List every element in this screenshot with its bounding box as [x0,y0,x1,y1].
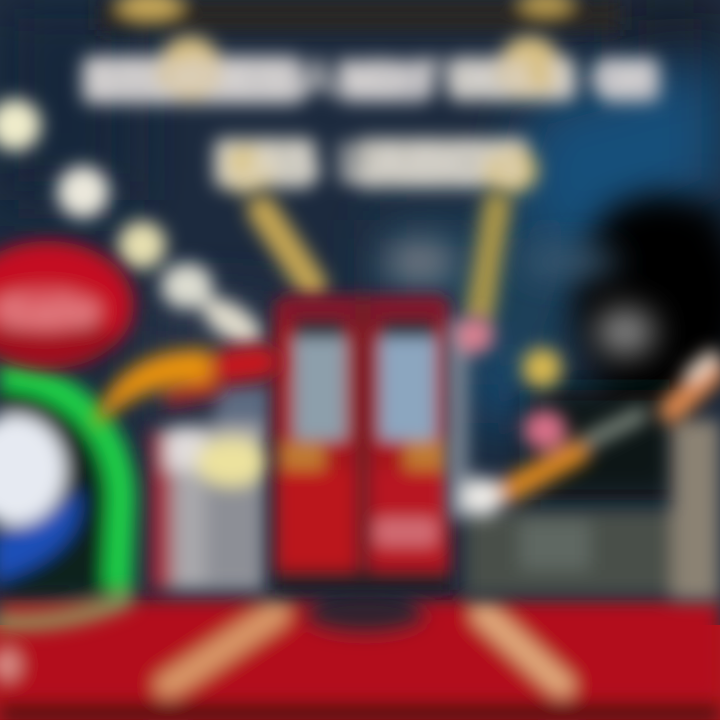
arrow red tail [170,388,215,398]
hanging gold strips [262,205,497,310]
tram [275,295,450,590]
title: LAS LABOS [215,130,525,195]
yellow light [522,348,562,388]
tram gold panels [282,442,324,470]
arrow orange shaft [92,350,212,430]
pink blob [523,410,567,450]
badge label: Sale [0,288,98,335]
top ceiling band [100,0,620,30]
right buildings [465,420,720,600]
right side pole [448,316,712,520]
orange arrow right [505,452,578,492]
globe white [0,415,65,525]
background colour washes [0,0,720,430]
orange arrow left [92,350,262,430]
ring base [0,600,125,622]
floor stripe right [484,614,562,686]
ceiling lights [118,0,182,19]
tram windows [294,332,346,440]
red badge [0,241,134,369]
tram body [275,298,450,583]
red floor [0,595,720,720]
title [82,36,660,195]
grey streak [590,415,640,440]
pink light [456,316,494,354]
floor stripe left [168,614,276,686]
arrow red head [228,362,262,366]
tram plate [375,518,437,546]
tram centre post [355,300,371,575]
globe badge [0,375,125,622]
title glow [82,36,660,194]
green ring [0,376,122,590]
globe blue [0,505,72,572]
grey sign blobs [384,240,655,356]
red floor base [0,625,720,720]
black area right [530,195,720,500]
tram lower panels [278,470,360,570]
left white building [150,385,270,590]
yellow lamp [196,438,268,486]
white end [462,477,502,517]
string of lights [0,99,270,355]
tram roof [280,295,448,325]
orange and white streak [672,372,712,410]
floor shadow [303,595,427,635]
